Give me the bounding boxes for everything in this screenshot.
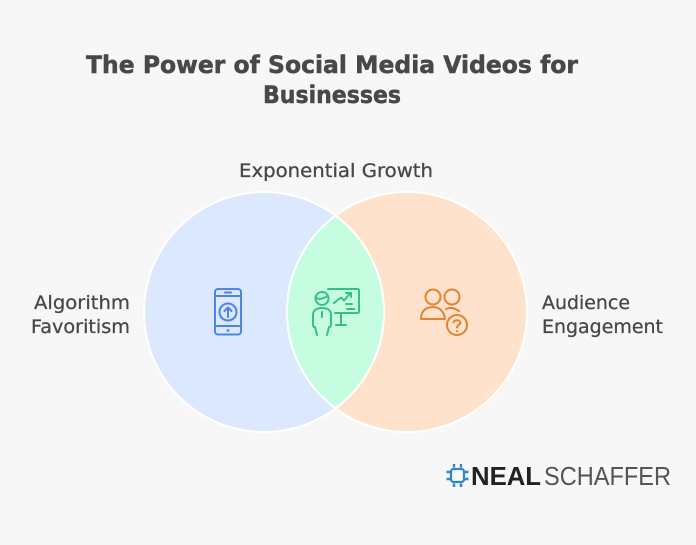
icon: presenter with growth chart [313, 289, 359, 335]
label: audience engagement [542, 292, 663, 338]
overlap: exponential growth [287, 216, 384, 408]
title: Businesses [263, 81, 401, 109]
label: audience engagement: Audience [542, 292, 630, 314]
icon: two people with question mark [421, 290, 467, 335]
icon: smartphone with up arrow [215, 289, 241, 334]
venn diagram [144, 192, 527, 432]
icon: logo chip [446, 464, 468, 487]
title: The Power of Social Media Videos for [86, 51, 578, 79]
circle: audience engagement [287, 192, 527, 432]
title [86, 51, 578, 109]
logo: neal schaffer [446, 461, 671, 491]
label: algorithm favoritism: Algorithm [34, 292, 130, 314]
label: algorithm favoritism [31, 292, 130, 338]
circle: algorithm favoritism [144, 192, 384, 432]
label: algorithm favoritism: Favoritism [31, 316, 130, 338]
label: audience engagement: Engagement [542, 316, 663, 338]
wordmark: NEAL [471, 461, 541, 491]
logo: neal schaffer: SCHAFFER [544, 461, 671, 491]
label: exponential growth: Exponential Growth [239, 160, 433, 182]
